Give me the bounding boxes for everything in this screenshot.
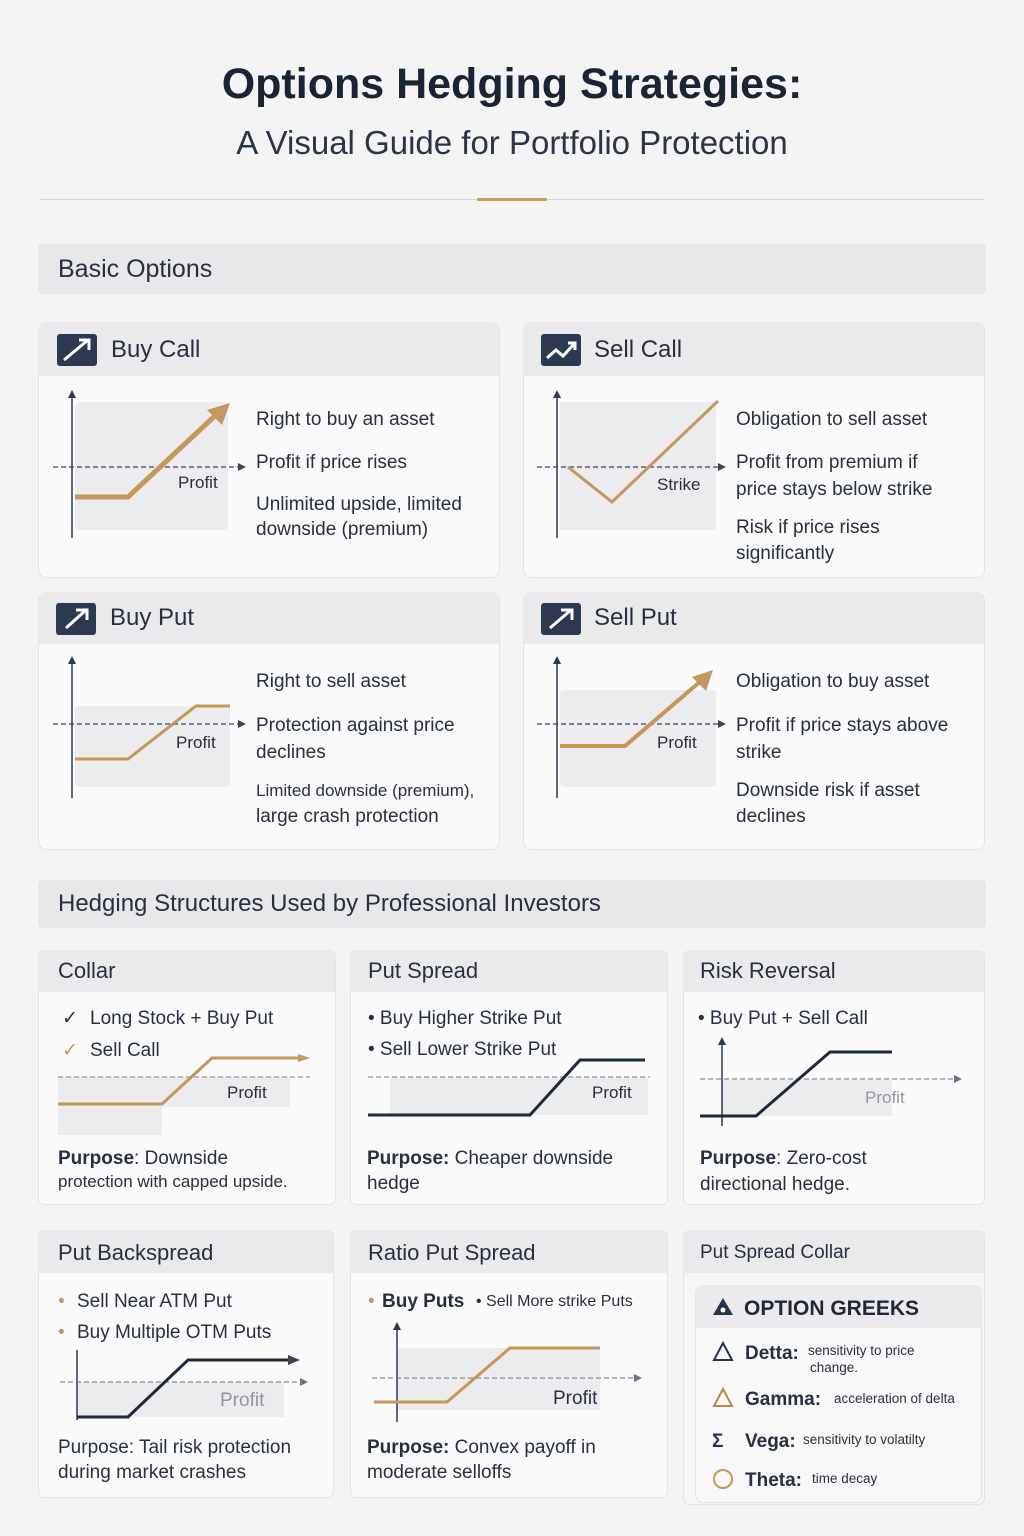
bullets — [368, 1008, 562, 1060]
title: Options Hedging Strategies: — [222, 60, 802, 108]
card title: Ratio Put Spread — [368, 1240, 536, 1265]
payoff chart — [537, 656, 726, 798]
bullets: ✓ — [62, 1008, 78, 1029]
bullets: • — [368, 1291, 375, 1312]
card: buy call — [38, 322, 500, 578]
description: strike — [736, 742, 781, 763]
description — [256, 409, 462, 540]
section heading: basic options: Basic Options — [58, 255, 212, 283]
section heading: hedging structures — [38, 880, 986, 928]
greek: gamma — [714, 1389, 955, 1410]
payoff chart — [60, 1350, 308, 1420]
card title: Buy Call — [111, 336, 200, 363]
panel: option greeks: OPTION GREEKS — [744, 1297, 919, 1320]
payoff chart: Profit — [592, 1083, 632, 1102]
payoff chart — [53, 656, 246, 798]
purpose: Purpose: Cheaper downside — [367, 1148, 613, 1169]
purpose: Purpose: Downside — [58, 1148, 228, 1169]
icon: triangle — [713, 1298, 733, 1315]
description: Profit from premium if — [736, 452, 918, 473]
bullets: • — [58, 1322, 65, 1343]
icon: sell call — [541, 334, 581, 366]
description: Obligation to buy asset — [736, 671, 930, 692]
description: Downside risk if asset — [736, 780, 920, 801]
greek: gamma: Gamma: — [745, 1389, 821, 1410]
bullets: Buy Puts — [382, 1291, 464, 1312]
section heading: basic options — [38, 244, 986, 294]
bullets — [368, 1291, 633, 1312]
payoff chart — [368, 1060, 650, 1115]
greek: theta: Theta: — [745, 1470, 802, 1491]
section heading: hedging structures: Hedging Structures Used by Professional Investors — [58, 890, 601, 917]
purpose: hedge — [367, 1173, 420, 1194]
description — [736, 409, 932, 564]
payoff chart: Strike — [657, 475, 700, 494]
card: sell put — [523, 592, 985, 850]
greek: vega — [712, 1431, 926, 1452]
purpose — [367, 1437, 596, 1483]
card title: Sell Put — [594, 604, 677, 631]
card: buy put — [38, 592, 500, 850]
description: Profit if price stays above — [736, 715, 948, 736]
purpose — [58, 1437, 291, 1483]
greek: theta: time decay — [812, 1471, 878, 1486]
payoff chart — [58, 1054, 310, 1135]
description: Right to buy an asset — [256, 409, 435, 430]
bullets: • Buy Put + Sell Call — [698, 1008, 868, 1029]
purpose: Purpose: Convex payoff in — [367, 1437, 596, 1458]
description: large crash protection — [256, 806, 439, 827]
payoff chart: Profit — [227, 1083, 267, 1102]
description: declines — [736, 806, 806, 827]
card title: Collar — [58, 958, 115, 983]
bullets: Sell Near ATM Put — [77, 1291, 233, 1312]
card title: Put Spread — [368, 958, 478, 983]
purpose: Purpose: Tail risk protection — [58, 1437, 291, 1458]
payoff chart: Profit — [220, 1390, 265, 1411]
payoff chart — [372, 1322, 642, 1422]
description: Right to sell asset — [256, 671, 407, 692]
bullets: ✓ — [62, 1040, 78, 1061]
greek: delta: sensitivity to price — [808, 1343, 915, 1358]
description: Obligation to sell asset — [736, 409, 928, 430]
description: Protection against price — [256, 715, 455, 736]
description: Profit if price rises — [256, 452, 407, 473]
card title: Risk Reversal — [700, 958, 836, 983]
purpose — [700, 1148, 868, 1195]
card: put spread — [350, 950, 668, 1205]
card: collar — [38, 950, 336, 1205]
payoff chart: Profit — [657, 733, 697, 752]
greek: delta: change. — [810, 1360, 858, 1375]
description: significantly — [736, 543, 835, 564]
description: Unlimited upside, limited — [256, 494, 462, 515]
purpose: during market crashes — [58, 1462, 246, 1483]
card: ratio put spread — [350, 1230, 668, 1498]
description: downside (premium) — [256, 519, 428, 540]
bullets: • — [58, 1291, 65, 1312]
greek: gamma: acceleration of delta — [834, 1391, 955, 1406]
bullets: Long Stock + Buy Put — [90, 1008, 274, 1029]
card: risk reversal — [683, 950, 985, 1205]
greek: delta: Detta: — [745, 1343, 799, 1364]
greek: theta — [714, 1470, 878, 1491]
purpose: Purpose: Zero-cost — [700, 1148, 868, 1169]
bullets — [62, 1008, 274, 1061]
card: sell call — [523, 322, 985, 578]
icon: buy put — [56, 603, 96, 635]
bullets: Buy Multiple OTM Puts — [77, 1322, 271, 1343]
icon: sell put — [541, 603, 581, 635]
bullets: • Sell Lower Strike Put — [368, 1039, 557, 1060]
bullets: • Buy Higher Strike Put — [368, 1008, 562, 1029]
card title: Put Spread Collar — [700, 1242, 851, 1263]
description: Risk if price rises — [736, 517, 880, 538]
payoff chart — [700, 1037, 962, 1126]
payoff chart — [53, 390, 246, 538]
purpose — [58, 1148, 288, 1191]
description — [256, 671, 474, 827]
greek: vega: Σ — [712, 1431, 723, 1452]
card: put spread collar — [683, 1230, 985, 1505]
payoff chart: Profit — [553, 1388, 598, 1409]
description — [736, 671, 948, 827]
payoff chart: Profit — [176, 733, 216, 752]
description: Limited downside (premium), — [256, 781, 474, 800]
payoff chart: Profit — [865, 1088, 905, 1107]
greek: delta — [714, 1343, 915, 1375]
card: put backspread — [38, 1230, 334, 1498]
description: price stays below strike — [736, 479, 932, 500]
purpose: protection with capped upside. — [58, 1172, 288, 1191]
bullets — [58, 1291, 271, 1343]
greek: vega: Vega: — [745, 1431, 796, 1452]
greek: vega: sensitivity to volatilty — [803, 1432, 926, 1447]
card title: Put Backspread — [58, 1240, 213, 1265]
payoff chart — [537, 390, 726, 538]
panel: option greeks — [696, 1285, 982, 1502]
icon: arrow up — [57, 334, 97, 366]
purpose: moderate selloffs — [367, 1462, 511, 1483]
description: declines — [256, 742, 326, 763]
card title: Buy Put — [110, 604, 194, 631]
bullets: • Sell More strike Puts — [476, 1293, 633, 1310]
purpose: directional hedge. — [700, 1174, 850, 1195]
payoff chart: Profit — [178, 473, 218, 492]
purpose — [367, 1148, 613, 1194]
card title: Sell Call — [594, 336, 682, 363]
subtitle: A Visual Guide for Portfolio Protection — [236, 124, 788, 161]
bullets: Sell Call — [90, 1040, 160, 1061]
